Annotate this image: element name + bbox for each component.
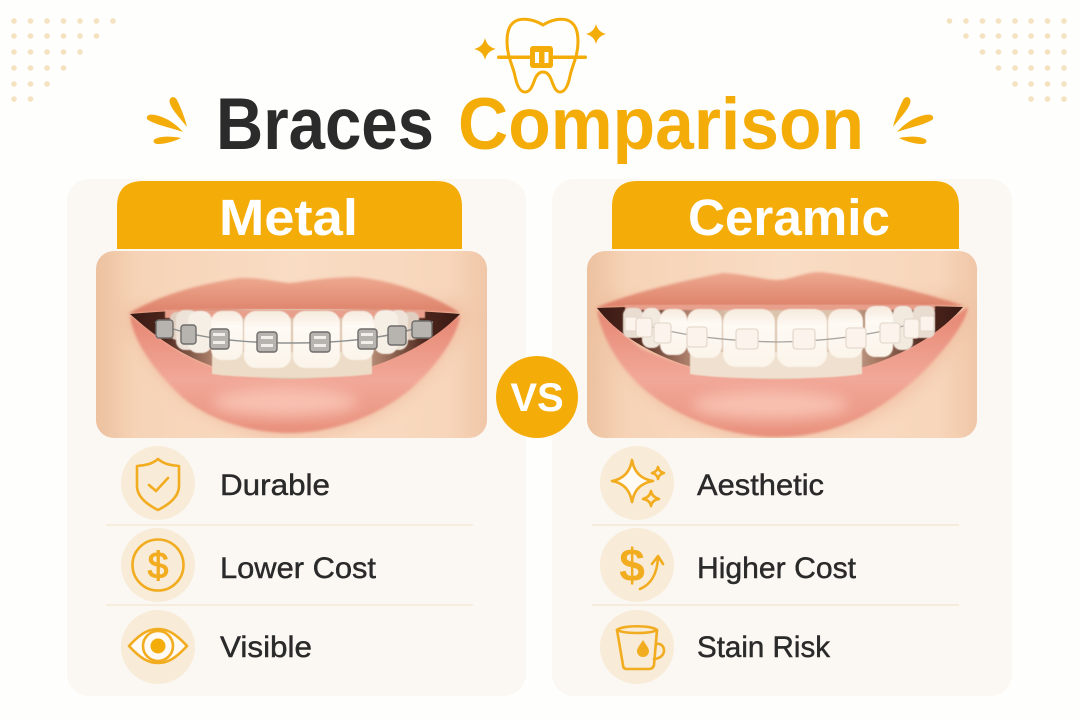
feature: stain risk xyxy=(600,610,831,684)
ceramic header tab: Ceramic xyxy=(688,189,890,246)
title: Braces xyxy=(216,84,434,165)
icon: right burst xyxy=(893,97,933,144)
metal header tab xyxy=(117,181,462,249)
icon: dollar coin xyxy=(121,528,195,602)
icon: tooth with bracket and sparkles xyxy=(474,19,606,92)
title: Comparison xyxy=(458,84,864,165)
photo: metal braces smile xyxy=(96,251,487,440)
icon: shield xyxy=(121,446,195,520)
feature: aesthetic: Aesthetic xyxy=(697,469,824,502)
icon: sparkles xyxy=(600,446,674,520)
icon: rising dollar xyxy=(600,528,674,602)
title xyxy=(216,84,864,165)
row dividers xyxy=(106,525,959,605)
VS badge: VS xyxy=(510,376,564,420)
feature: higher cost xyxy=(600,528,857,602)
feature: aesthetic xyxy=(600,446,824,520)
feature: higher cost: Higher Cost xyxy=(697,552,857,585)
metal header tab: Metal xyxy=(219,189,358,246)
icon: dollar coin: $ xyxy=(148,545,168,586)
icon: eye xyxy=(121,610,195,684)
panel: metal xyxy=(67,179,526,696)
ceramic header tab xyxy=(612,181,959,249)
icon: rising dollar: $ xyxy=(619,539,645,591)
VS badge xyxy=(496,356,578,438)
feature: visible xyxy=(121,610,312,684)
decorative dots: top right xyxy=(947,18,1067,102)
feature: durable xyxy=(121,446,330,520)
panel: ceramic xyxy=(552,179,1012,696)
feature: stain risk: Stain Risk xyxy=(697,631,831,664)
photo: ceramic braces smile xyxy=(587,251,977,442)
feature: lower cost: Lower Cost xyxy=(220,552,377,585)
feature: durable: Durable xyxy=(220,469,330,502)
feature: lower cost xyxy=(121,528,377,602)
icon: left burst xyxy=(147,97,187,144)
feature: visible: Visible xyxy=(220,631,312,664)
decorative dots: top left xyxy=(11,18,116,102)
icon: cup with drop xyxy=(600,610,674,684)
